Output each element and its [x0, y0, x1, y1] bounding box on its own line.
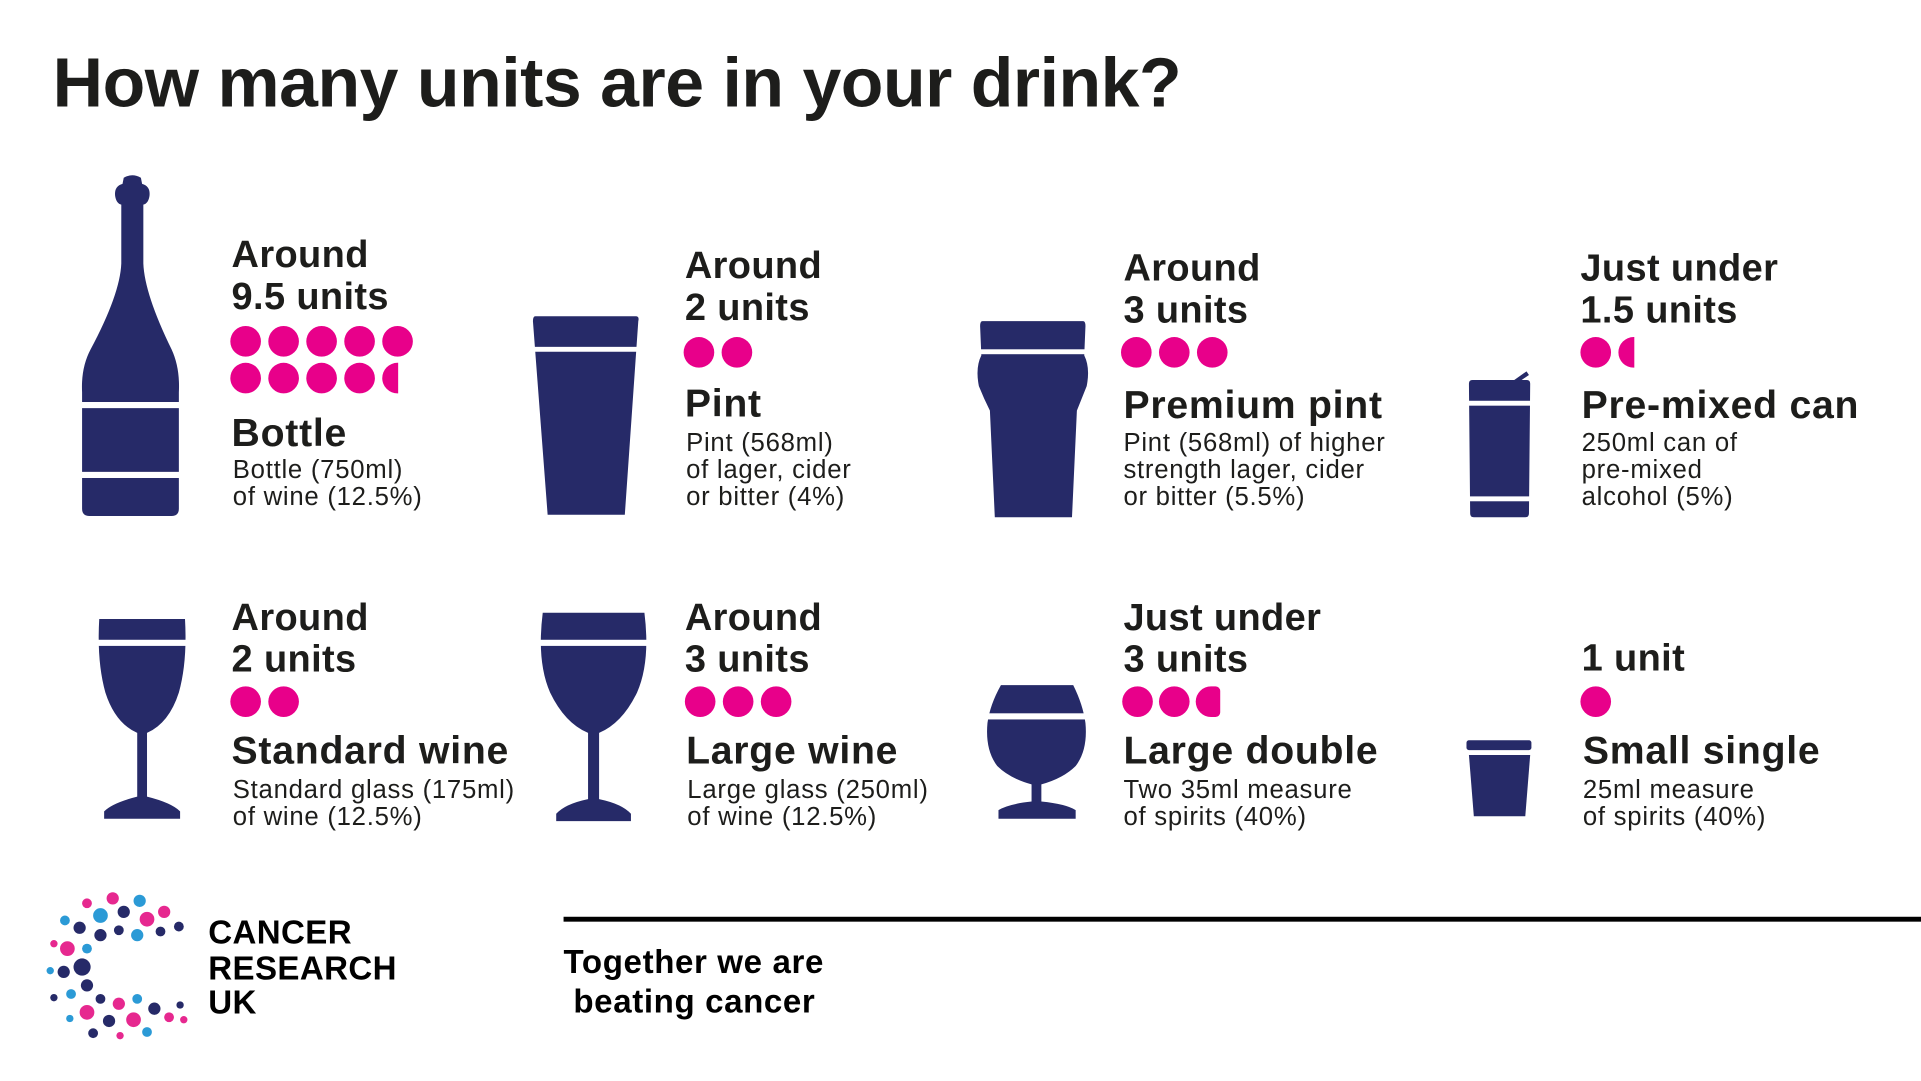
panel: small single: Small single	[1583, 728, 1820, 772]
divider line	[564, 917, 1921, 922]
panel: large double: of spirits (40%)	[1123, 803, 1307, 831]
panel: premium pint: Pint (568ml) of higher	[1123, 429, 1386, 457]
panel: pre-mixed can: 250ml can of	[1582, 429, 1738, 457]
panel: standard wine: of wine (12.5%)	[233, 803, 423, 831]
panel: premium pint: Premium pint	[1123, 382, 1383, 427]
text: can: Just under	[1580, 246, 1778, 289]
text: small single: 1 unit	[1582, 636, 1685, 679]
icon: standard wine glass	[98, 619, 186, 819]
text: standard wine	[232, 596, 369, 680]
text: premium pint	[1123, 246, 1261, 331]
text: can	[1580, 246, 1778, 331]
text: premium pint: Around	[1123, 246, 1261, 289]
icon: snifter glass	[987, 685, 1086, 819]
panel: large wine: Large wine	[686, 728, 898, 772]
panel: large wine	[540, 596, 929, 831]
text: bottle: Around	[232, 233, 369, 276]
text: premium pint: 3 units	[1123, 288, 1248, 331]
icon: large wine glass	[540, 612, 646, 822]
tagline	[564, 944, 824, 1020]
panel: large double: Large double	[1123, 728, 1378, 772]
panel: standard wine: Standard glass (175ml)	[233, 776, 515, 804]
panel: standard wine: Standard wine	[232, 728, 509, 772]
text: bottle	[232, 233, 389, 317]
panel: small single: 25ml measure	[1583, 776, 1755, 804]
panel: bottle: of wine (12.5%)	[233, 483, 423, 511]
panel: pre-mixed can	[1468, 246, 1859, 518]
text: large double: Just under	[1123, 596, 1321, 639]
icon: spirit tumbler	[1466, 740, 1532, 816]
panel: pre-mixed can: pre-mixed	[1582, 456, 1703, 484]
panel: pint	[532, 244, 852, 515]
panel: premium pint	[978, 246, 1386, 518]
panel: pint: or bitter (4%)	[686, 483, 845, 511]
icon: wine bottle	[82, 175, 179, 516]
tagline: beating cancer	[573, 983, 815, 1020]
tagline: Together we are	[564, 944, 824, 980]
panel: large double: Two 35ml measure	[1123, 776, 1353, 804]
panel: bottle: Bottle	[232, 411, 347, 455]
text: pint: Around	[685, 244, 822, 287]
text: standard wine: 2 units	[232, 637, 357, 680]
text: large double: 3 units	[1123, 637, 1248, 680]
icon: pint glass	[532, 316, 639, 515]
panel: large wine: Large glass (250ml)	[687, 776, 929, 804]
panel: bottle: Bottle (750ml)	[233, 456, 403, 484]
text: pint: 2 units	[685, 286, 810, 328]
text: large wine	[685, 596, 822, 680]
panel: large double	[987, 596, 1378, 831]
logo: Cancer Research UK	[46, 892, 397, 1040]
logo dots	[46, 892, 188, 1040]
panel: pre-mixed can: Pre-mixed can	[1582, 382, 1859, 427]
panel: premium pint: or bitter (5.5%)	[1123, 483, 1305, 511]
panel: standard wine	[98, 596, 515, 831]
title: How many units are in your drink?	[53, 44, 1181, 123]
text: bottle: 9.5 units	[232, 275, 389, 317]
panel: pint: Pint	[685, 381, 762, 425]
panel: pint: Pint (568ml)	[686, 429, 834, 457]
logo text	[208, 914, 397, 1021]
text: large wine: Around	[685, 596, 822, 639]
text: large wine: 3 units	[685, 637, 810, 680]
panel: bottle	[82, 175, 423, 516]
panel: small single: of spirits (40%)	[1583, 803, 1766, 831]
text: large double	[1123, 596, 1321, 680]
panel: pint: of lager, cider	[686, 456, 852, 484]
logo text: RESEARCH	[208, 949, 397, 986]
text: pint	[685, 244, 822, 328]
icon: premium pint glass	[978, 321, 1088, 518]
panel: small single	[1466, 636, 1820, 831]
unit dots	[230, 326, 413, 357]
logo text: UK	[208, 984, 257, 1021]
text: can: 1.5 units	[1580, 288, 1738, 331]
text: standard wine: Around	[232, 596, 369, 639]
panel: large wine: of wine (12.5%)	[687, 803, 877, 831]
panel: premium pint: strength lager, cider	[1123, 456, 1365, 484]
icon: can	[1468, 372, 1530, 518]
panel: pre-mixed can: alcohol (5%)	[1582, 483, 1733, 511]
logo text: CANCER	[208, 914, 352, 951]
